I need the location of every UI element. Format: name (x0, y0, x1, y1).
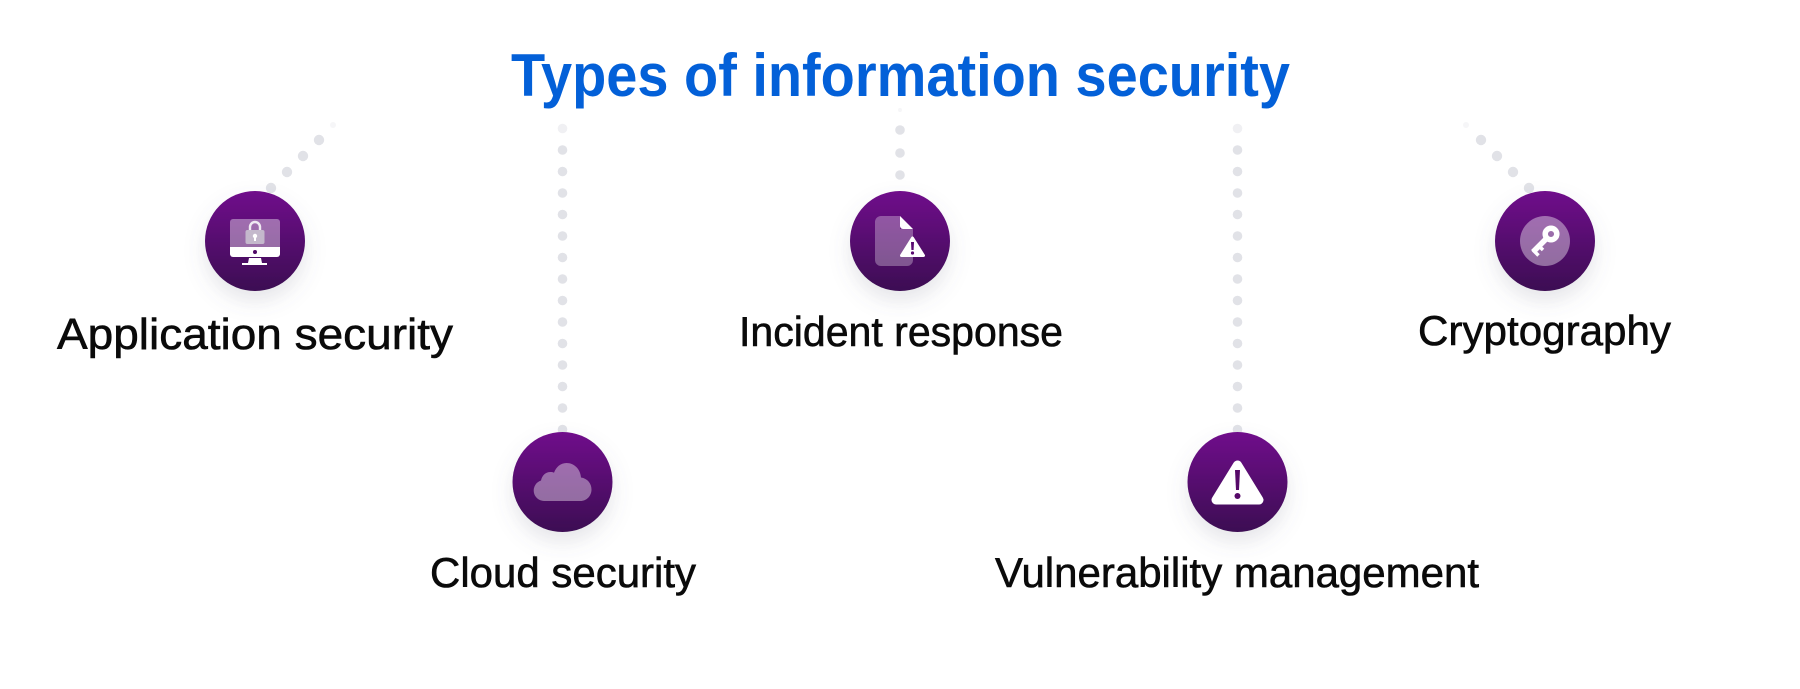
icon: cloud (512, 432, 612, 532)
item: cryptography (1418, 191, 1671, 354)
item: cloud security (430, 432, 696, 596)
dotted connector: vulnerability management (1233, 124, 1242, 434)
icon: key (1495, 191, 1595, 291)
item: incident response (739, 191, 1063, 355)
label: incident response: Incident response (739, 308, 1063, 355)
label: application security: Application security (57, 310, 453, 359)
icon: monitor with padlock (205, 191, 305, 291)
dotted connector: cloud security (558, 124, 567, 434)
icon: warning triangle (1188, 432, 1288, 532)
dotted connector: cryptography (1463, 122, 1534, 193)
dotted connector: incident response (895, 108, 905, 180)
item: application security (57, 191, 453, 359)
label: cloud security: Cloud security (430, 549, 696, 596)
label: vulnerability management: Vulnerability management (995, 549, 1479, 596)
item: vulnerability management (995, 432, 1479, 596)
title: Types of information security (511, 42, 1291, 109)
dotted connector: application security (266, 122, 336, 193)
label: cryptography: Cryptography (1418, 307, 1671, 354)
icon: document with warning (850, 191, 950, 291)
